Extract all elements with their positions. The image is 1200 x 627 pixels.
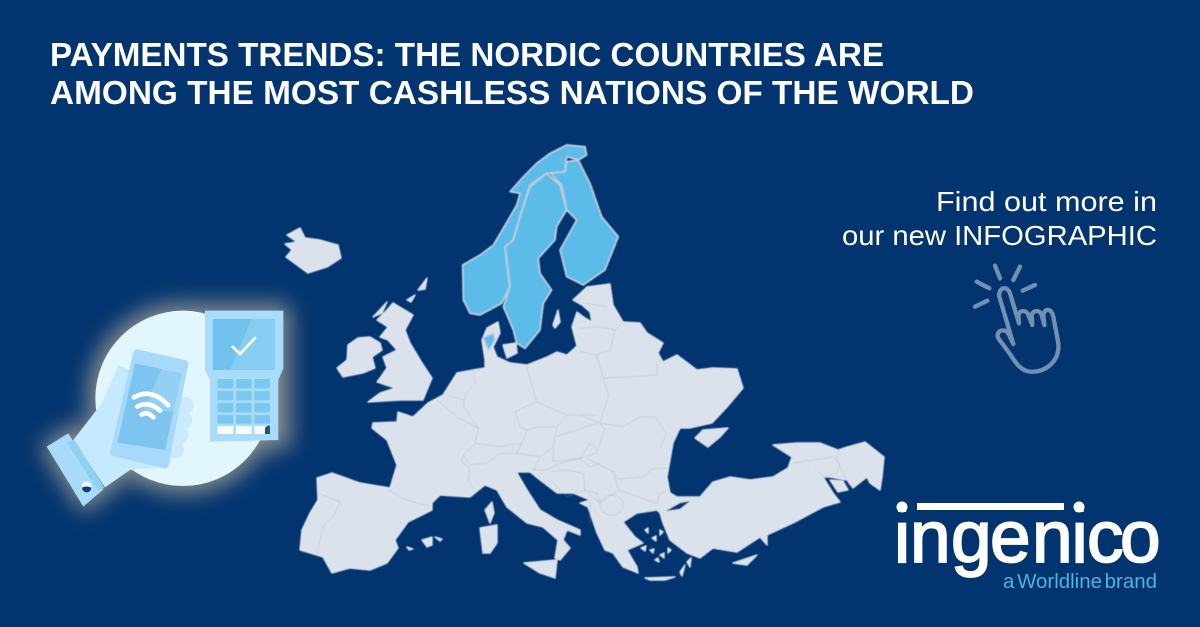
glow <box>40 303 290 513</box>
smartphone <box>113 353 185 465</box>
Mediterranean islands <box>407 428 757 580</box>
wifi symbol <box>134 394 168 417</box>
icon: pointing hand <box>975 266 1058 372</box>
logo dot right <box>1074 502 1084 512</box>
Great Britain <box>368 303 432 402</box>
land masses <box>285 228 884 580</box>
fingers <box>166 397 194 458</box>
Danish and Baltic islands <box>503 310 560 358</box>
logo bar <box>917 503 1064 510</box>
Denmark <box>483 333 495 351</box>
title: PAYMENTS TRENDS: THE NORDIC COUNTRIES ARE <box>50 36 884 73</box>
call to action text: our new INFOGRAPHIC <box>842 220 1157 251</box>
national borders <box>317 303 850 553</box>
call to action text: Find out more in <box>936 186 1157 217</box>
hand and cuff <box>47 365 194 507</box>
logo tagline: a Worldline brand <box>1003 570 1157 593</box>
cuff button <box>82 482 92 492</box>
keypad <box>217 379 270 424</box>
Sea of Marmara <box>666 501 690 511</box>
Norway <box>463 145 587 315</box>
Caucasus coastal island <box>830 480 848 492</box>
Aegean islands <box>641 528 691 576</box>
logo dot left <box>896 502 908 512</box>
title <box>50 36 974 111</box>
card terminal <box>205 311 283 442</box>
logo wordmark: ingenico <box>894 497 1161 578</box>
payment circle <box>95 311 271 486</box>
Nordic countries <box>463 145 618 351</box>
call to action text <box>842 186 1157 251</box>
mainland Europe <box>300 284 884 573</box>
title: AMONG THE MOST CASHLESS NATIONS OF THE WORLD <box>50 74 974 111</box>
Sweden <box>503 173 567 348</box>
illustration: contactless payment <box>40 303 290 513</box>
logo: ingenico <box>892 497 1161 593</box>
map of Europe <box>285 145 884 580</box>
northern isles <box>373 278 427 317</box>
Iceland <box>285 228 341 273</box>
logo dot masks <box>892 512 1090 521</box>
check mark <box>232 337 256 354</box>
Ireland <box>337 337 382 377</box>
Finland <box>550 160 618 285</box>
